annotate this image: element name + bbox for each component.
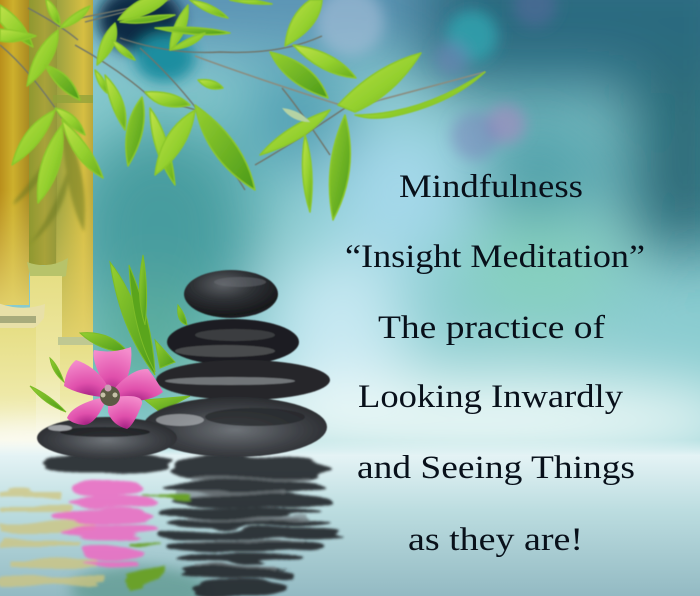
leaf reflection	[125, 495, 190, 592]
leaf cluster right	[260, 0, 485, 220]
stone: top	[184, 270, 278, 318]
heading line 2: “Insight Meditation”	[345, 239, 645, 275]
body line 3: and Seeing Things	[357, 450, 635, 486]
reflection in water	[0, 452, 342, 596]
leaf cluster centre hanging	[95, 70, 255, 190]
icon: pink flower	[64, 347, 163, 429]
teal water patch	[70, 566, 210, 596]
stone: second	[167, 319, 299, 365]
stone: third	[156, 360, 330, 400]
water surface	[0, 440, 700, 596]
body line 4: as they are!	[408, 522, 583, 558]
text block: mindfulness message	[345, 169, 645, 558]
body line 2: Looking Inwardly	[358, 379, 624, 415]
stone: bottom	[143, 397, 327, 457]
small green leaves behind flower	[30, 255, 190, 412]
bamboo branches	[0, 0, 485, 190]
stone stack	[37, 270, 330, 459]
bamboo leaves, upper spray	[0, 0, 485, 220]
leaf cluster left	[0, 0, 103, 203]
bamboo reflection	[0, 490, 105, 586]
leaf cluster centre top	[97, 0, 272, 89]
body line 1: The practice of	[378, 310, 605, 346]
bamboo shadow leaves	[13, 125, 85, 245]
stone: left	[37, 417, 177, 459]
stone reflection	[39, 452, 342, 596]
heading line 1: Mindfulness	[399, 169, 583, 205]
flower reflection	[55, 477, 157, 567]
bamboo stalks	[0, 0, 120, 485]
